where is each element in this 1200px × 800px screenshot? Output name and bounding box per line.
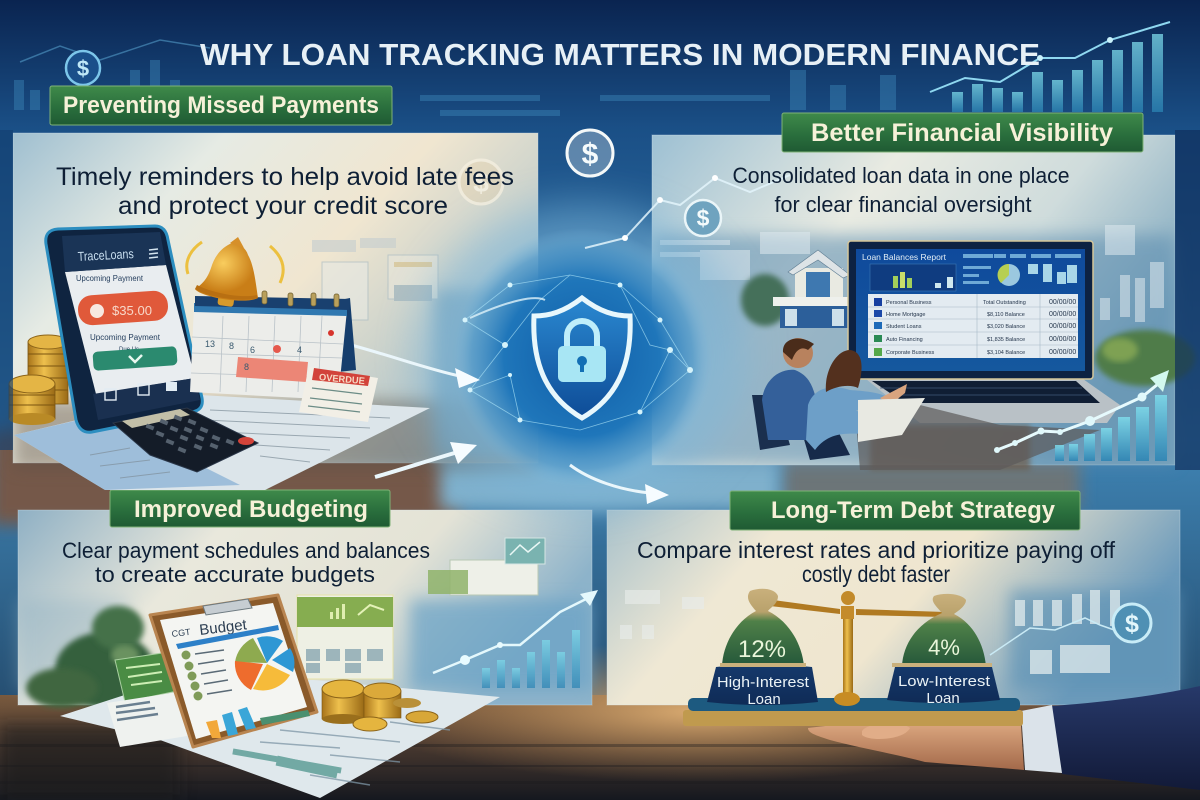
clipboard with budget: Budget (198, 616, 249, 639)
icon: security shield with padlock (534, 298, 630, 418)
loan table: Student Loans (886, 324, 922, 330)
right drum low-interest loan: Low-Interest (898, 673, 991, 690)
left drum high-interest loan (707, 663, 818, 708)
text block: improved budgeting: Clear payment schedules and balances (62, 538, 430, 563)
scale column and beam (770, 591, 945, 706)
central security orb (417, 205, 747, 505)
calendar: 8 (244, 362, 249, 372)
shirt cuff (1021, 705, 1062, 773)
arrow: toward shield from panel one (340, 342, 480, 388)
green document with chart (297, 595, 393, 679)
loan table: 00/00/00 (1049, 323, 1076, 330)
growth bars and arrow (994, 370, 1169, 461)
text block: preventing missed payments: and protect your credit score (118, 192, 448, 220)
rising line chart across center (585, 175, 790, 248)
ribbon heading: long-term debt strategy: Long-Term Debt Strategy (771, 497, 1056, 524)
smartphone: TraceLoans (77, 246, 134, 264)
loan table (868, 294, 1078, 358)
overdue notice card (299, 367, 378, 422)
icon: dollar coin, panel one: $ (473, 167, 489, 198)
smartphone (46, 226, 202, 432)
smartphone: Due Us (119, 347, 139, 353)
laptop screen (848, 241, 1093, 379)
text block: better financial visibility: for clear financial oversight (774, 192, 1032, 217)
loan table: $1,835 Balance (987, 337, 1025, 343)
left money bag 12 percent: 12% (738, 636, 786, 663)
loan table: $3,104 Balance (987, 350, 1025, 356)
text block: preventing missed payments (56, 163, 514, 220)
calendar: 13 (205, 339, 215, 349)
text block: better financial visibility: Consolidated loan data in one place (732, 163, 1070, 188)
loan table: $8,110 Balance (987, 312, 1025, 318)
ribbon heading: preventing missed payments: Preventing Missed Payments (63, 92, 379, 119)
smartphone: Upcoming Payment (76, 274, 144, 283)
text block: improved budgeting (62, 538, 430, 587)
paper sheets on desk (14, 395, 430, 490)
icon: dollar coin, panel two (685, 200, 721, 236)
icon: dollar coin, panel two: $ (697, 205, 710, 231)
panel: better financial visibility (652, 135, 1175, 470)
text block: long-term debt strategy: costly debt faster (802, 561, 950, 587)
laptop base and keyboard (866, 379, 1120, 423)
arrow: from budgeting panel toward shield (375, 442, 477, 477)
icon: dollar coin, panel one (459, 160, 503, 204)
illustration: budget clipboard, coins and statements (26, 538, 598, 798)
panel: improved budgeting (18, 510, 592, 705)
clipboard with budget (150, 595, 317, 747)
statement papers (60, 680, 500, 798)
illustration: phone, bell, calendar and calculator (9, 226, 430, 490)
text block: long-term debt strategy: Compare interest rates and prioritize paying off (637, 537, 1116, 563)
laptop screen: Loan Balances Report (862, 252, 947, 262)
overdue notice card: OVERDUE (318, 372, 365, 387)
loan table: $3,020 Balance (987, 324, 1025, 330)
icon: dollar coin, center top (567, 130, 613, 176)
illustration: laptop, house, team and growth chart (741, 241, 1195, 470)
ribbon heading: improved budgeting: Improved Budgeting (134, 496, 368, 523)
left money bag 12 percent (722, 589, 804, 666)
ribbon heading: better financial visibility (782, 113, 1143, 152)
title: WHY LOAN TRACKING MATTERS IN MODERN FINANCE (200, 37, 1040, 72)
right drum low-interest loan: Loan (926, 690, 960, 707)
arrow: toward debt strategy panel (570, 465, 669, 504)
house (773, 250, 862, 328)
text block: long-term debt strategy (637, 537, 1116, 587)
gold coins (322, 680, 438, 731)
ribbon heading: long-term debt strategy (730, 491, 1080, 530)
ringing bell (187, 237, 283, 307)
text block: preventing missed payments: Timely reminders to help avoid late fees (56, 163, 514, 191)
loan table: Personal Business (886, 300, 932, 306)
loan table: Corporate Business (886, 350, 935, 356)
calendar: 4 (297, 345, 302, 355)
top header chart decoration (14, 22, 1170, 116)
icon: dollar coin, top left: $ (77, 56, 89, 81)
left drum high-interest loan: Loan (747, 691, 781, 708)
side edge shading (0, 130, 1200, 470)
right money bag 4 percent: 4% (928, 635, 960, 660)
panel: long-term debt strategy (607, 510, 1180, 705)
ribbon heading: better financial visibility: Better Financial Visibility (811, 119, 1113, 147)
panel: preventing missed payments (13, 133, 538, 470)
balance plate (683, 710, 1023, 726)
loan table: 00/00/00 (1049, 336, 1076, 343)
bushes (741, 274, 1195, 386)
loan table: Home Mortgage (886, 312, 925, 318)
rising chart and bars (433, 590, 598, 688)
decorative dashboard documents (312, 238, 438, 320)
icon: dollar coin, lower right (1113, 604, 1151, 642)
calendar (190, 291, 356, 400)
ribbon heading: preventing missed payments (50, 86, 392, 125)
calendar: 6 (250, 345, 255, 355)
open hand (808, 711, 1024, 770)
loan table: Total Outstanding (983, 300, 1026, 306)
loan table: Auto Financing (886, 337, 923, 343)
text block: better financial visibility (732, 163, 1070, 217)
suit sleeve (1050, 686, 1200, 790)
right drum low-interest loan (887, 663, 1000, 707)
text block: improved budgeting: to create accurate budgets (95, 562, 375, 587)
calendar: 8 (229, 341, 234, 351)
loan table: 00/00/00 (1049, 311, 1076, 318)
gold coin stacks (9, 335, 68, 425)
pie chart (235, 636, 294, 690)
smartphone: $35.00 (112, 303, 152, 318)
icon: dollar coin, center top: $ (582, 138, 599, 171)
arrow: toward visibility panel (470, 298, 545, 318)
smartphone: Upcoming Payment (90, 333, 161, 342)
calculator (113, 408, 258, 472)
clipboard with budget: CGT (171, 627, 192, 639)
green and white note cards (107, 651, 193, 747)
loan table: 00/00/00 (1049, 349, 1076, 356)
right money bag 4 percent (902, 594, 986, 666)
green document right (428, 538, 545, 595)
icon: dollar coin, top left (66, 51, 100, 85)
desk surface (856, 405, 1100, 470)
left drum high-interest loan: High-Interest (717, 674, 810, 691)
illustration: interest rate scale on open hand (683, 589, 1200, 790)
loan table: 00/00/00 (1049, 299, 1076, 306)
colleagues viewing laptop (752, 338, 925, 460)
bush (26, 606, 155, 708)
ribbon heading: improved budgeting (110, 490, 390, 527)
icon: dollar coin, lower right: $ (1125, 610, 1139, 638)
